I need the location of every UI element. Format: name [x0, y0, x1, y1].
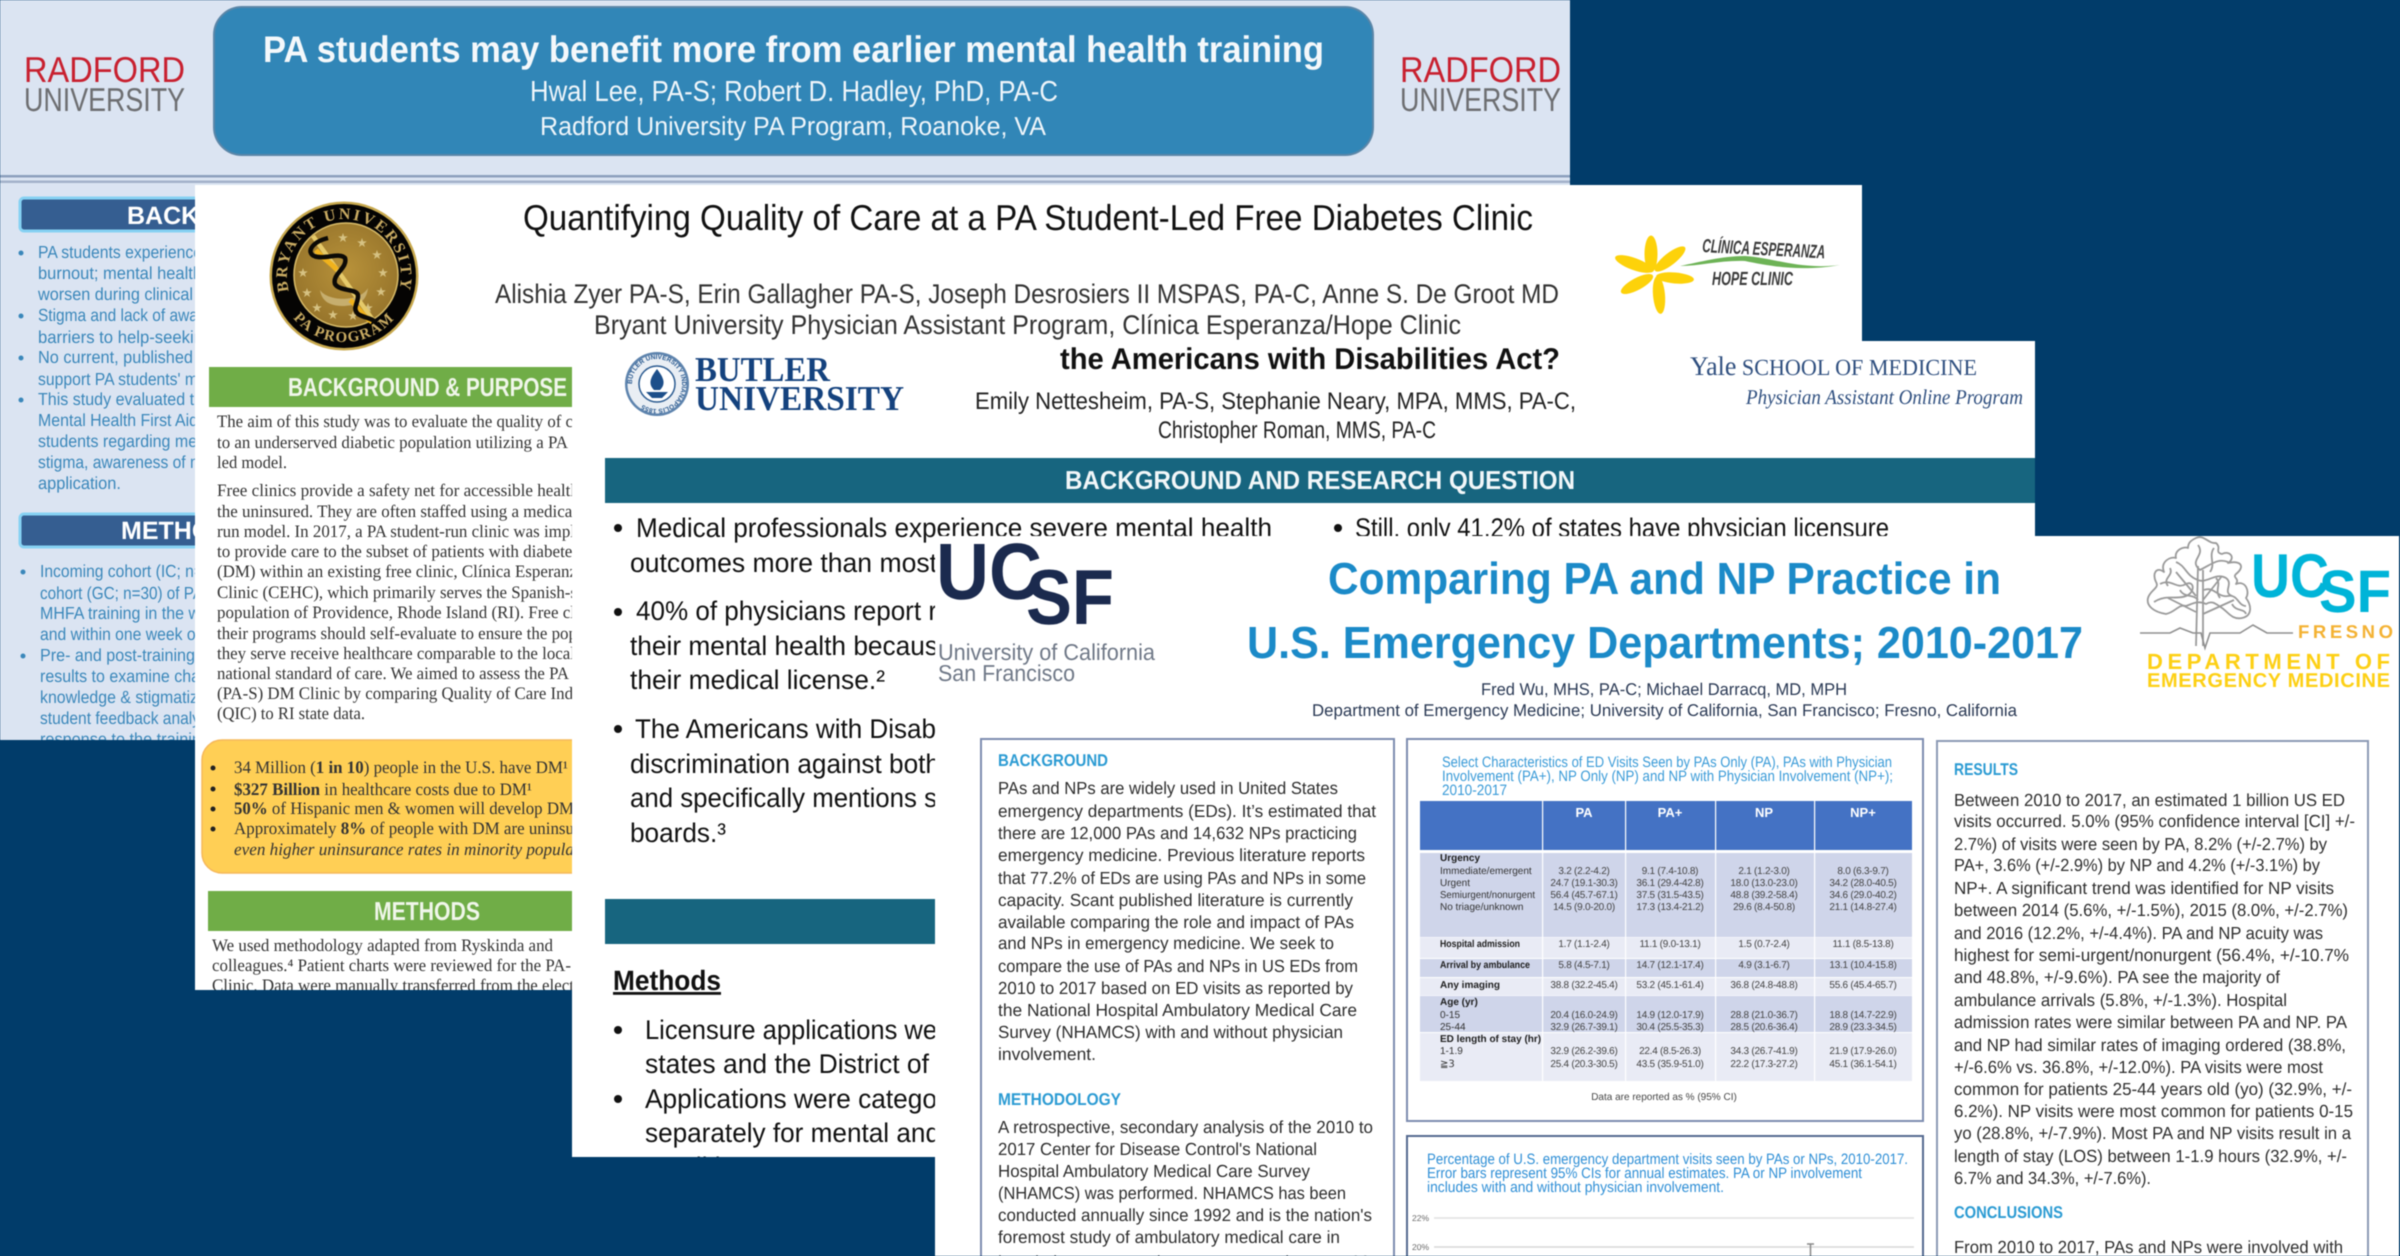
- table: 34.6 (29.0-40.2): [1829, 890, 1897, 901]
- table: 18.8 (14.7-22.9): [1829, 1010, 1897, 1021]
- text block: methods bullets: MHFA training in the w: [40, 603, 200, 623]
- text block: methods: states and the District of: [645, 1049, 929, 1079]
- table: 22.4 (8.5-26.3): [1639, 1046, 1701, 1057]
- panel: background and methodology column: there are 12,000 PAs and 14,632 NPs practicing: [998, 823, 1357, 843]
- heading: background and purpose: BACKGROUND & PURPOSE: [288, 372, 567, 402]
- table: 1.7 (1.1-2.4): [1558, 939, 1610, 950]
- text block: background bullets: The Americans with Disab: [635, 714, 936, 744]
- table: 36.8 (24.8-48.8): [1730, 980, 1798, 991]
- heading: background and purpose: [208, 366, 573, 408]
- text block: methods bullets: knowledge & stigmatiz: [40, 687, 198, 707]
- text block: methods bullets: Pre- and post-training: [40, 645, 195, 665]
- table: 25.4 (20.3-30.5): [1550, 1059, 1618, 1070]
- text block: background and purpose: to provide care to the subset of patients with diabetes: [217, 541, 579, 561]
- table: 48.8 (39.2-58.4): [1730, 890, 1798, 901]
- title: Quantifying Quality of Care at a PA Student-Led Free Diabetes Clinic: [523, 197, 1533, 238]
- table: 13.1 (10.4-15.8): [1829, 960, 1897, 971]
- text block: methods: Applications were catego: [645, 1084, 937, 1114]
- text block: background bullets: stigma, awareness of m: [38, 452, 203, 472]
- table: 14.9 (12.0-17.9): [1636, 1010, 1704, 1021]
- table: 38.8 (32.2-45.4): [1550, 980, 1618, 991]
- text block: background and purpose: Free clinics provide a safety net for accessible health: [217, 480, 579, 500]
- panel: results and conclusions column: RESULTS: [1954, 760, 2018, 779]
- text block: methods bullets: cohort (GC; n=30) of PA: [40, 583, 203, 603]
- logo: Bryant University PA program seal: ★: [297, 266, 309, 280]
- text block: background bullets: application.: [38, 473, 121, 493]
- heading: background: BACKGROUND: [127, 202, 310, 230]
- authors: Bryant University Physician Assistant Program, Clínica Esperanza/Hope Clinic: [594, 310, 1461, 340]
- text block: background bullets: No current, published: [38, 347, 193, 367]
- text block: background bullets: Medical professionals experience severe mental health: [636, 513, 1272, 543]
- panel: background and methodology column: and NPs in emergency medicine. We seek to: [998, 933, 1334, 953]
- logo: Bryant University PA program seal: ★: [337, 231, 349, 245]
- logo: Bryant University PA program seal: ★: [371, 248, 383, 262]
- panel: percentage of ED visits chart: [1407, 1136, 1923, 1256]
- logo: Bryant University PA program seal: ★: [377, 266, 389, 280]
- callout: diabetes statistics: 50% of Hispanic men & women will develop DM: [234, 798, 574, 818]
- header banner: Radford University PA Program, Roanoke, VA: [540, 111, 1047, 141]
- heading: methods: [18, 512, 196, 549]
- table: ED length of stay (hr): [1440, 1034, 1541, 1045]
- text block: methods bullets: response to the training: [40, 729, 210, 749]
- logo: Radford University left: RADFORD: [24, 49, 185, 90]
- panel: results and conclusions column: common for patients 25-44 years old (yo) (32.9%, +/-: [1954, 1079, 2352, 1099]
- text block: methods bullets: results to examine cha: [40, 666, 200, 686]
- authors: Emily Nettesheim, PA-S, Stephanie Neary, MPA, MMS, PA-C,: [975, 388, 1576, 415]
- text block: methods: separately for mental and: [645, 1118, 940, 1148]
- logo: Bryant University PA program seal: PA PROGRAM: [292, 311, 394, 343]
- table: 20.4 (16.0-24.9): [1550, 1010, 1618, 1021]
- text block: background and purpose: they serve receive healthcare comparable to the local: [217, 643, 575, 663]
- table: 22.2 (17.3-27.2): [1730, 1059, 1798, 1070]
- text block: background and purpose: Clinic (CEHC), which primarily serves the Spanish-s: [217, 582, 577, 602]
- text block: methods: Methods: [613, 965, 721, 996]
- table caption: 2010-2017: [1442, 782, 1507, 799]
- logo: Bryant University PA program seal: [268, 200, 420, 352]
- line chart fragment: [1412, 1213, 1914, 1256]
- panel: results and conclusions column: Between 2010 to 2017, an estimated 1 billion US ED: [1954, 790, 2345, 810]
- logo: Radford University left: [25, 56, 185, 112]
- table caption: Involvement (PA+), NP Only (NP) and NP with Physician Involvement (NP+);: [1442, 768, 1893, 785]
- text block: background and purpose: run model. In 2017, a PA student-run clinic was impl: [217, 521, 575, 541]
- table: 2.1 (1.2-3.0): [1738, 866, 1790, 877]
- table: 1-1.9: [1440, 1046, 1463, 1057]
- panel: background and methodology column: compare the use of PAs and NPs in US EDs from: [998, 956, 1358, 976]
- table: NP+: [1850, 805, 1876, 820]
- logo: Bryant University PA program seal: BRYANT UNIVERSITY: [276, 208, 412, 294]
- text block: background and purpose: population of Providence, Rhode Island (RI). Free cl: [217, 602, 575, 622]
- table: 14.5 (9.0-20.0): [1553, 902, 1615, 913]
- panel: background and methodology column: A retrospective, secondary analysis of the 2010 to: [998, 1117, 1373, 1137]
- heading: background and research question: [605, 458, 2035, 503]
- authors: [1312, 680, 2018, 720]
- logo: UCSF: UC: [936, 527, 1042, 616]
- text block: methods bullets: [20, 564, 196, 741]
- logo: Butler University: [624, 351, 904, 417]
- logo: Radford University right: RADFORD: [1400, 49, 1561, 90]
- callout: diabetes statistics: even higher uninsurance rates in minority popula: [234, 839, 574, 859]
- table: 32.9 (26.2-39.6): [1550, 1046, 1618, 1057]
- table: 34.3 (26.7-41.9): [1730, 1046, 1798, 1057]
- panel: background and methodology column: emergency departments (EDs). It’s estimated that: [998, 801, 1376, 821]
- heading: methods: METHODS: [121, 517, 246, 545]
- text block: methods bullets: student feedback analy: [40, 708, 200, 728]
- panel: background and methodology column: [981, 739, 1394, 1256]
- panel: background and methodology column: capacity. Scant published literature is currently: [998, 890, 1353, 910]
- logo: Clínica Esperanza Hope Clinic: CLÍNICA ESPERANZA: [1702, 235, 1826, 263]
- table: Urgency: [1440, 853, 1480, 864]
- text block: background bullets: Mental Health First Aid: [38, 410, 198, 430]
- table: 11.1 (8.5-13.8): [1832, 939, 1894, 950]
- table: NP: [1755, 805, 1773, 820]
- panel: background and methodology column: involvement.: [998, 1044, 1096, 1064]
- panel: UCSF PA and NP practice poster: [935, 527, 2399, 1256]
- table: 34.2 (28.0-40.5): [1829, 878, 1897, 889]
- table: 55.6 (45.4-65.7): [1829, 980, 1897, 991]
- table: 3.2 (2.2-4.2): [1558, 866, 1610, 877]
- logo: Bryant University PA program seal: ★: [375, 285, 387, 299]
- heading: second teal band: [604, 898, 936, 945]
- logo: Bryant University PA program seal: ★: [362, 301, 374, 315]
- callout: diabetes statistics: [200, 738, 573, 874]
- logo: Bryant University PA program seal: ★: [347, 309, 359, 323]
- chart caption: Error bars represent 95% CIs for annual estimates. PA or NP involvement: [1427, 1165, 1863, 1182]
- table footnote: Data are reported as % (95% CI): [1591, 1092, 1737, 1103]
- panel: background and methodology column: foremost study of ambulatory medical care in: [998, 1227, 1340, 1247]
- panel: background and methodology column: 2017 Center for Disease Control's National: [998, 1139, 1317, 1159]
- table: 29.6 (8.4-50.8): [1733, 902, 1795, 913]
- logo: UCSF Fresno Department of Emergency Medicine: DEPARTMENT OF: [2147, 649, 2390, 674]
- table caption: [1442, 754, 1893, 799]
- text block: methods: conditions.: [645, 1152, 770, 1182]
- text block: background bullets: Stigma and lack of awar: [38, 305, 203, 325]
- logo: UCSF: SF: [1026, 553, 1114, 641]
- table: 4.9 (3.1-6.7): [1738, 960, 1790, 971]
- text block: background and purpose: [217, 411, 579, 723]
- table: PA+: [1658, 805, 1683, 820]
- text block: background bullets: Still, only 41.2% of states have physician licensure: [1355, 513, 1889, 543]
- text block: methods: [212, 938, 573, 991]
- text block: background bullets: 40% of physicians report r: [636, 596, 937, 626]
- panel: background and methodology column: the National Hospital Ambulatory Medical Care: [998, 1000, 1357, 1020]
- text block: methods: Clinic. Data were manually transferred from the elect: [212, 975, 574, 995]
- text block: background bullets: their medical license.²: [630, 665, 885, 695]
- text block: background bullets: discrimination against both: [630, 749, 940, 779]
- heading: methods: METHODS: [374, 896, 480, 926]
- panel: Radford mental health poster: [0, 0, 1570, 749]
- table: 53.2 (45.1-61.4): [1636, 980, 1704, 991]
- table: 21.1 (14.8-27.4): [1829, 902, 1897, 913]
- chart caption: [1427, 1151, 1908, 1196]
- logo: Bryant University PA program seal: ★: [301, 286, 313, 300]
- text block: background bullets: This study evaluated th: [38, 389, 203, 409]
- authors: Fred Wu, MHS, PA-C; Michael Darracq, MD, MPH: [1481, 680, 1847, 699]
- panel: background and methodology column: emergency medicine. Previous literature reports: [998, 845, 1365, 865]
- callout: diabetes statistics: Approximately 8% of people with DM are uninsu: [234, 818, 574, 838]
- text block: background and purpose: (DM) within an existing free clinic, Clínica Esperanz: [217, 561, 577, 581]
- table: 1.5 (0.7-2.4): [1738, 939, 1790, 950]
- panel: results and conclusions column: highest for semi-urgent/nonurgent (56.4%, +/-10.7%: [1954, 945, 2349, 965]
- table: 8.0 (6.3-9.7): [1837, 866, 1889, 877]
- logo: Bryant University PA program seal: ★: [356, 236, 368, 250]
- header banner: [214, 7, 1373, 155]
- table: 14.7 (12.1-17.4): [1636, 960, 1704, 971]
- title: the Americans with Disabilities Act?: [1060, 343, 1560, 376]
- logo: Clínica Esperanza Hope Clinic: [1613, 235, 1840, 314]
- panel: results and conclusions column: 2.7%) of visits were seen by PA, 8.2% (+/-2.7%) by: [1954, 834, 2327, 854]
- panel: results and conclusions column: ambulance arrivals (5.8%, +/-1.3%). Hospital: [1954, 990, 2287, 1010]
- panel: results and conclusions column: +/-6.6% vs. 36.8%, +/-12.0%). PA visits were most: [1954, 1057, 2323, 1077]
- table: 18.0 (13.0-23.0): [1730, 878, 1798, 889]
- text block: methods: [612, 968, 936, 1158]
- panel: results and conclusions column: yo (28.8%, +/-7.9%). Most PA and NP visits result in a: [1954, 1123, 2351, 1143]
- panel: Butler ADA poster: [571, 340, 2036, 1158]
- table: 21.9 (17.9-26.0): [1829, 1046, 1897, 1057]
- logo: UCSF: University of California: [938, 639, 1155, 665]
- text block: methods: We used methodology adapted from Ryskinda and: [212, 935, 553, 955]
- text block: background and purpose: (QIC) to RI state data.: [217, 703, 365, 723]
- header banner: PA students may benefit more from earlier mental health training: [263, 29, 1324, 70]
- logo: UCSF Fresno Department of Emergency Medicine: EMERGENCY MEDICINE: [2147, 670, 2390, 692]
- panel: results and conclusions column: CONCLUSIONS: [1954, 1203, 2063, 1222]
- text block: methods bullets: Incoming cohort (IC; n=: [40, 561, 203, 581]
- text block: methods: colleagues.⁴ Patient charts were reviewed for the PA-: [212, 955, 571, 975]
- panel: results and conclusions column: [1937, 741, 2368, 1256]
- line chart fragment: 20%: [1412, 1242, 1429, 1252]
- panel: background and methodology column: that 77.2% of EDs are using PAs and NPs in some: [998, 868, 1366, 888]
- table: Immediate/emergent: [1440, 866, 1532, 877]
- title: Comparing PA and NP Practice in: [1328, 553, 2001, 604]
- text block: background and purpose: to an underserved diabetic population utilizing a PA: [217, 432, 568, 452]
- panel: results and conclusions column: 6.2%). NP visits were most common for patients 0-15: [1954, 1101, 2353, 1121]
- logo: UCSF Fresno Department of Emergency Medicine: UC: [2251, 542, 2329, 611]
- text block: background and purpose: their programs should self-evaluate to ensure the pop: [217, 623, 577, 643]
- heading: methods: [207, 890, 573, 932]
- table: Hospital admission: [1440, 939, 1520, 950]
- table: 9.1 (7.4-10.8): [1642, 866, 1698, 877]
- chart caption: includes with and without physician involvement.: [1427, 1179, 1724, 1196]
- panel: results and conclusions column: and 48.8%, +/-9.6%). PA see the majority of: [1954, 967, 2280, 987]
- panel: results and conclusions column: PA+, 3.6% (+/-2.9%) by NP and 4.2% (+/-3.1%) by: [1954, 855, 2320, 875]
- logo: UCSF Fresno Department of Emergency Medicine: FRESNO: [2298, 621, 2393, 642]
- title: U.S. Emergency Departments; 2010-2017: [1247, 617, 2083, 668]
- panel: background and methodology column: METHODOLOGY: [998, 1090, 1122, 1109]
- logo: UCSF: San Francisco: [938, 660, 1075, 686]
- logo: Butler University: BUTLER: [695, 350, 831, 389]
- authors: [975, 388, 1576, 444]
- table: Semiurgent/nonurgent: [1440, 890, 1535, 901]
- text block: background bullets: support PA students' m: [38, 369, 198, 389]
- table: 17.3 (13.4-21.2): [1636, 902, 1704, 913]
- panel: background and methodology column: conducted annually since 1992 and is the nation's: [998, 1205, 1372, 1225]
- callout: diabetes statistics: $327 Billion in healthcare costs due to DM¹: [234, 779, 532, 799]
- logo: Butler University: BUTLER UNIVERSITY INDIANAPOLIS 1855: [626, 354, 688, 414]
- table: 28.5 (20.6-36.4): [1730, 1022, 1798, 1033]
- panel: results and conclusions column: between 2014 (5.6%, +/-1.5%), 2015 (8.0%, +/-2.7%): [1954, 900, 2348, 920]
- table: 24.7 (19.1-30.3): [1550, 878, 1618, 889]
- text block: methods: Licensure applications we: [645, 1015, 937, 1045]
- text block: background and purpose: The aim of this study was to evaluate the quality of c: [217, 411, 573, 431]
- panel: background and methodology column: 2010 to 2017 based on ED visits as reported by: [998, 978, 1353, 998]
- text block: background bullets: barriers to help-seekin: [38, 327, 203, 347]
- logo: Yale School of Medicine: [1690, 351, 2023, 409]
- header banner: Hwal Lee, PA-S; Robert D. Hadley, PhD, PA-C: [530, 76, 1058, 108]
- panel: background and methodology column: Hospital Ambulatory Medical Care Survey: [998, 1161, 1310, 1181]
- table: Arrival by ambulance: [1440, 960, 1530, 971]
- panel: background and methodology column: BACKGROUND: [998, 751, 1108, 770]
- table: 5.8 (4.5-7.1): [1558, 960, 1610, 971]
- table: 25-44: [1440, 1022, 1466, 1033]
- callout: diabetes statistics: 34 Million (1 in 10) people in the U.S. have DM¹: [234, 757, 568, 777]
- title: [1247, 553, 2083, 668]
- table: Urgent: [1440, 878, 1470, 889]
- text block: background bullets: students regarding men: [38, 431, 206, 451]
- table: PA: [1575, 805, 1593, 820]
- panel: results and conclusions column: and 2016 (12.2%, +/-4.4%). PA and NP acuity was: [1954, 923, 2323, 943]
- logo: Radford University right: [1401, 56, 1561, 112]
- heading: background and research question: BACKGROUND AND RESEARCH QUESTION: [1065, 465, 1575, 495]
- panel: results and conclusions column: and NP had similar rates of imaging ordered (38.8%,: [1954, 1035, 2346, 1055]
- authors: Alishia Zyer PA-S, Erin Gallagher PA-S, Joseph Desrosiers II MSPAS, PA-C, Anne S. De Groot MD: [495, 279, 1559, 309]
- panel: characteristics table: [1407, 739, 1923, 1121]
- heading: background: [18, 196, 196, 233]
- table: 11.1 (9.0-13.1): [1639, 939, 1701, 950]
- panel: results and conclusions column: NP+. A significant trend was identified for NP visits: [1954, 878, 2334, 898]
- panel: background and methodology column: (NHAMCS) was performed. NHAMCS has been: [998, 1183, 1346, 1203]
- text block: background bullets: PA students experience: [38, 242, 202, 262]
- table: 37.5 (31.5-43.5): [1636, 890, 1704, 901]
- table: [1420, 801, 1912, 1081]
- authors: [495, 279, 1559, 340]
- table: 28.8 (21.0-36.7): [1730, 1010, 1798, 1021]
- table: 32.9 (26.7-39.1): [1550, 1022, 1618, 1033]
- logo: Butler University: UNIVERSITY: [695, 379, 904, 418]
- logo: Radford University right: UNIVERSITY: [1400, 81, 1561, 118]
- logo: Bryant University PA program seal: ★: [310, 248, 322, 262]
- table: 43.5 (35.9-51.0): [1636, 1059, 1704, 1070]
- logo: Bryant University PA program seal: ★: [311, 301, 323, 315]
- logo: UCSF Fresno Department of Emergency Medicine: [2140, 537, 2393, 692]
- text block: background bullets: [614, 513, 1889, 848]
- logo: UCSF: [938, 542, 1156, 682]
- text block: background bullets: and specifically mentions s: [630, 783, 937, 813]
- table: 28.9 (23.3-34.5): [1829, 1022, 1897, 1033]
- logo: Bryant University PA program seal: ★: [327, 308, 339, 322]
- chart caption: Percentage of U.S. emergency department visits seen by PAs or NPs, 2010-2017.: [1427, 1151, 1908, 1168]
- panel: results and conclusions column: visits occurred. 5.0% (95% confidence interval [CI] +/-: [1954, 811, 2355, 831]
- table: 36.1 (29.4-42.8): [1636, 878, 1704, 889]
- text block: background bullets: worsen during clinical: [37, 284, 193, 304]
- text block: background bullets: their mental health becaus: [630, 631, 938, 661]
- table: No triage/unknown: [1440, 902, 1523, 913]
- table: ≧3: [1440, 1059, 1455, 1070]
- table: 30.4 (25.5-35.3): [1636, 1022, 1704, 1033]
- panel: results and conclusions column: admission rates were similar between PA and NP. PA: [1954, 1012, 2347, 1032]
- logo: Clínica Esperanza Hope Clinic: HOPE CLINIC: [1712, 269, 1793, 290]
- table: Any imaging: [1440, 980, 1500, 991]
- text block: methods bullets: and within one week of: [40, 624, 200, 644]
- text block: background bullets: outcomes more than most: [630, 548, 937, 578]
- authors: Department of Emergency Medicine; University of California, San Francisco; Fresno, California: [1312, 701, 2018, 720]
- panel: background and methodology column: available comparing the role and impact of PAs: [998, 912, 1354, 932]
- panel: results and conclusions column: length of stay (LOS) between 1-1.9 hours (32.9%, +/-: [1954, 1146, 2347, 1166]
- panel: background and methodology column: PAs and NPs are widely used in United States: [998, 778, 1338, 798]
- table: Age (yr): [1440, 997, 1478, 1008]
- logo: Radford University left: UNIVERSITY: [24, 81, 185, 118]
- authors: Christopher Roman, MMS, PA-C: [1158, 417, 1436, 444]
- text block: background bullets: [18, 242, 206, 493]
- panel: background and methodology column: Survey (NHAMCS) with and without physician: [998, 1022, 1343, 1042]
- text block: background and purpose: led model.: [217, 452, 287, 472]
- panel: Bryant diabetes clinic poster: [194, 184, 1863, 991]
- line chart fragment: 22%: [1412, 1213, 1429, 1223]
- text block: background and purpose: national standard of care. We aimed to assess the PA: [217, 663, 569, 683]
- table: 45.1 (36.1-54.1): [1829, 1059, 1897, 1070]
- logo: Yale School of Medicine: Yale SCHOOL OF MEDICINE: [1690, 351, 1977, 381]
- text block: background bullets: burnout; mental health: [38, 263, 202, 283]
- text block: background and purpose: the uninsured. They are often staffed using a medical: [217, 501, 577, 521]
- table caption: Select Characteristics of ED Visits Seen by PAs Only (PA), PAs with Physician: [1442, 754, 1892, 771]
- logo: UCSF Fresno Department of Emergency Medicine: SF: [2319, 558, 2391, 625]
- text block: background and purpose: (PA-S) DM Clinic by comparing Quality of Care Ind: [217, 683, 573, 703]
- logo: Yale School of Medicine: Physician Assistant Online Program: [1745, 385, 2023, 409]
- panel: results and conclusions column: 6.7% and 34.3%, +/-7.6%).: [1954, 1168, 2151, 1188]
- text block: background bullets: boards.³: [630, 818, 726, 848]
- table: 0-15: [1440, 1010, 1460, 1021]
- table: 56.4 (45.7-67.1): [1550, 890, 1618, 901]
